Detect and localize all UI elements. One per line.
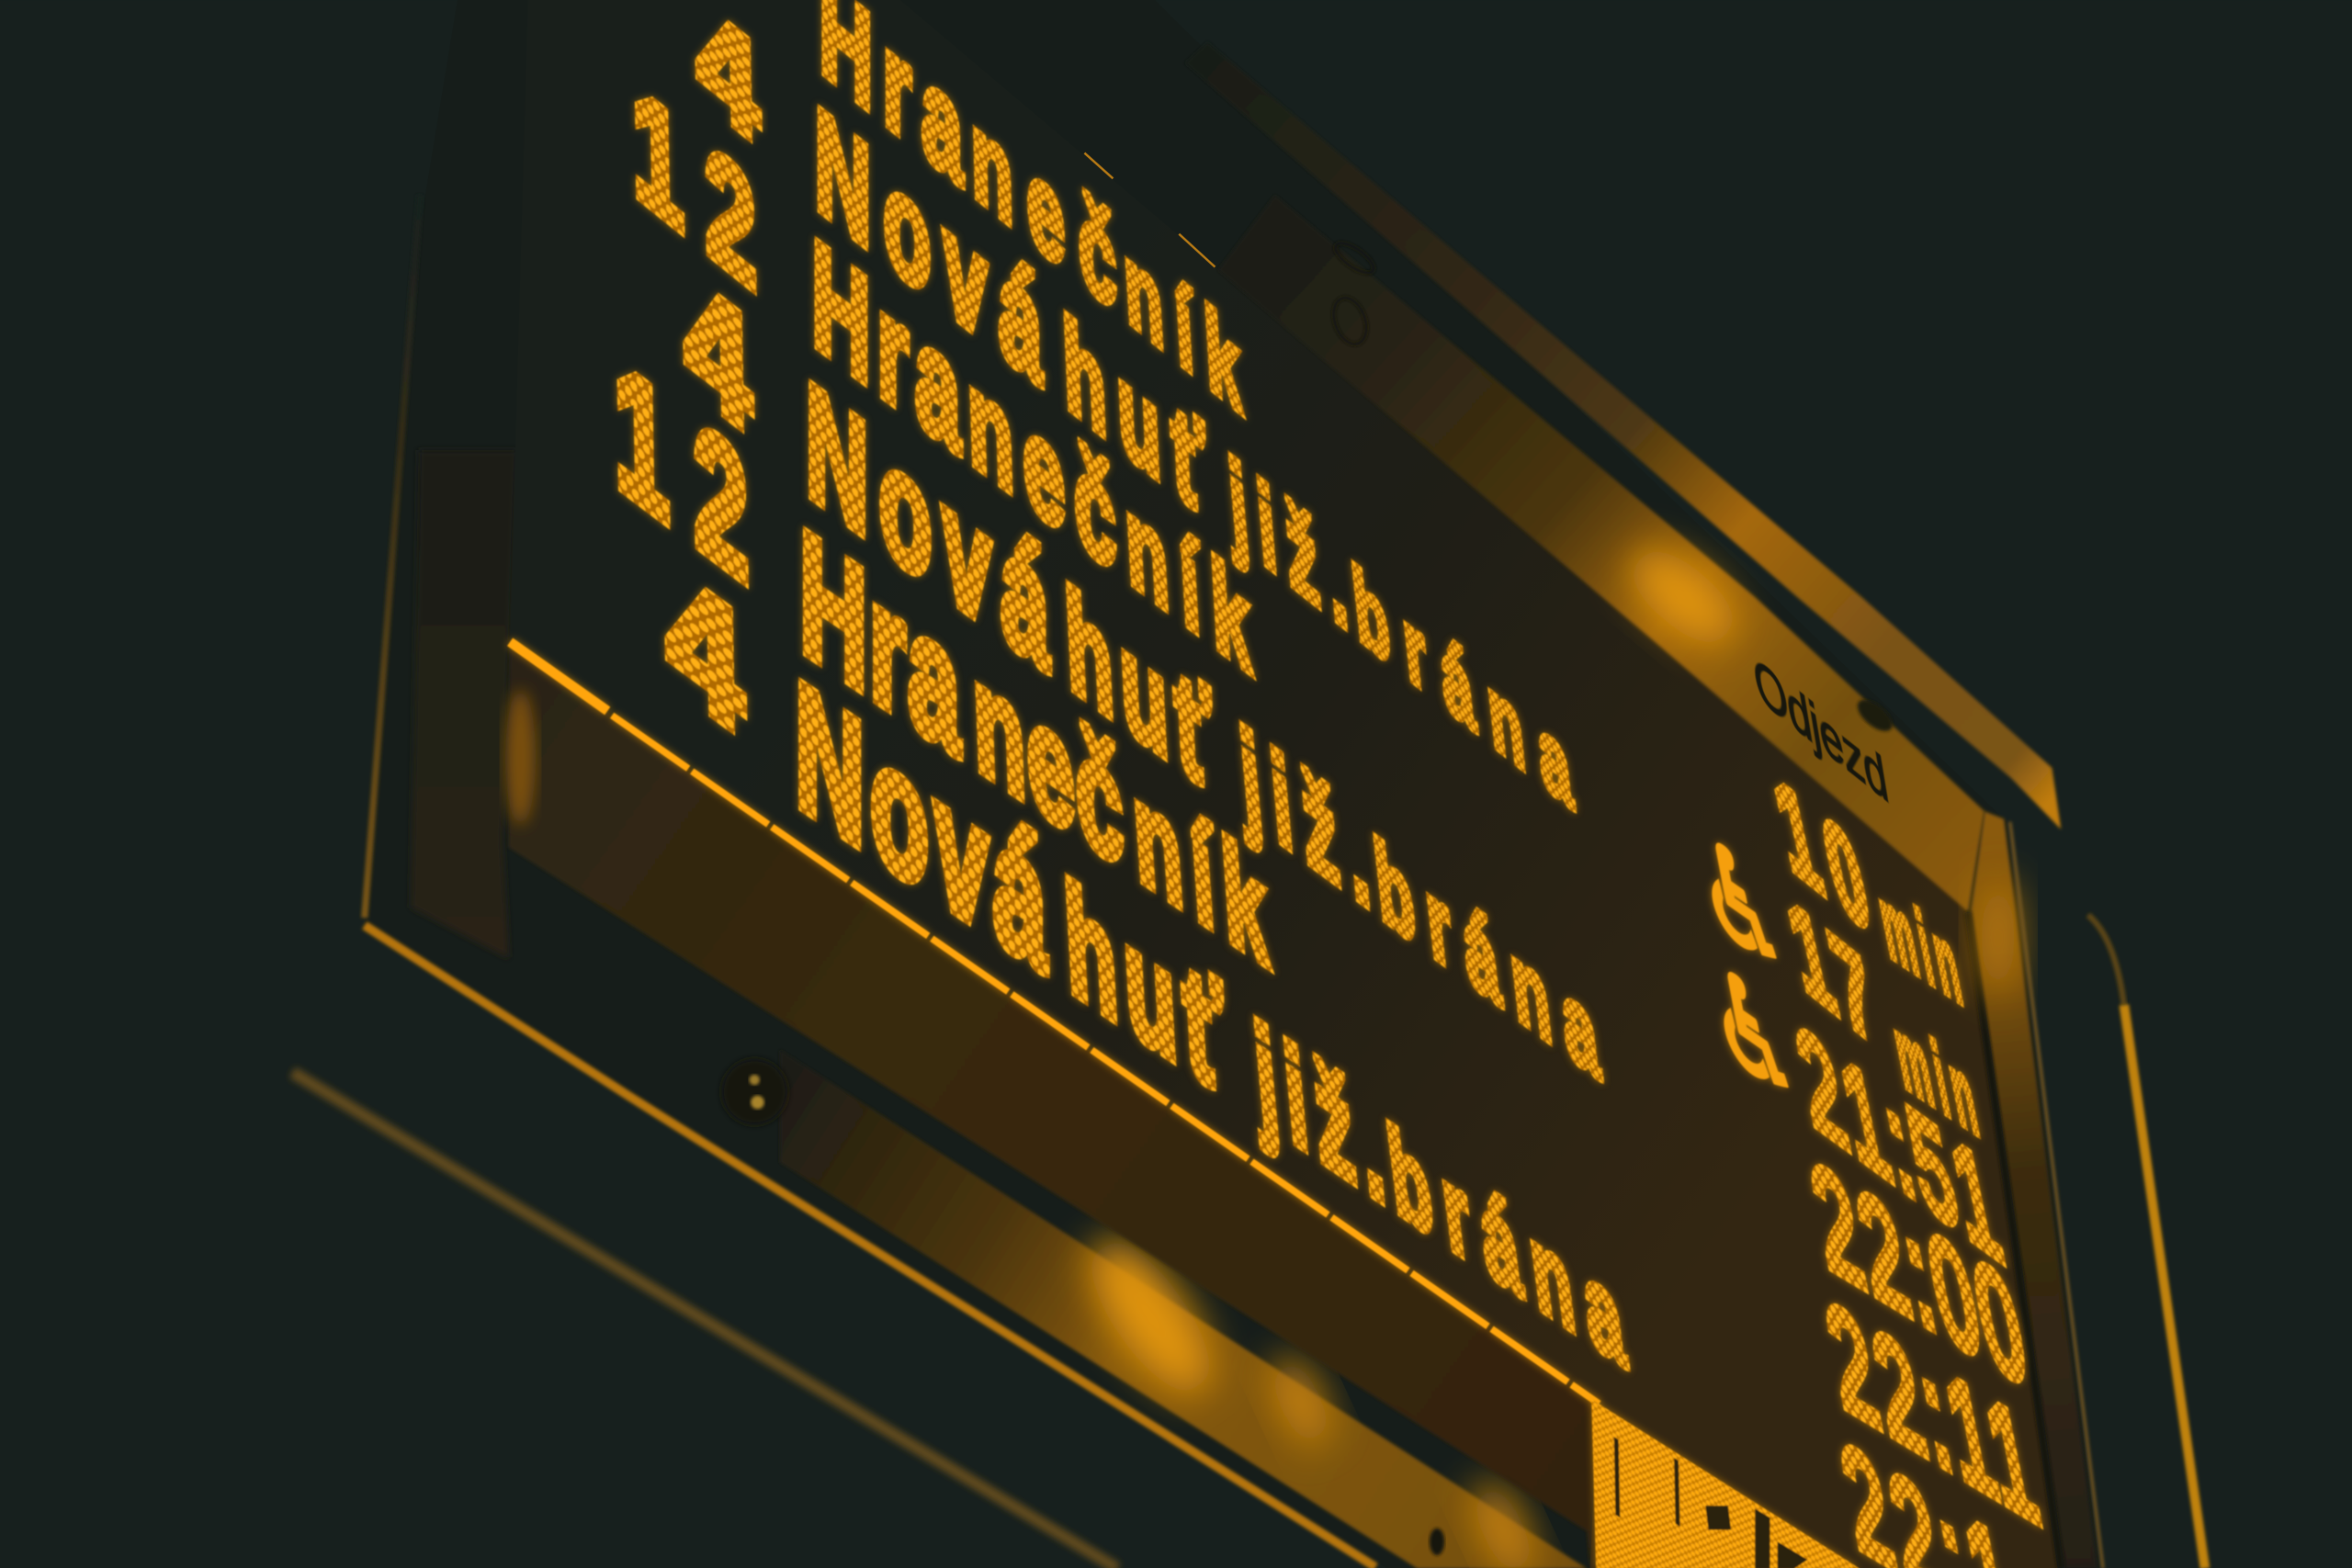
LED destinations row 2: Nová huť již.brána: Nová bbox=[815, 74, 1043, 418]
mounting marks bbox=[1328, 238, 1378, 349]
band glare bbox=[1615, 534, 1750, 660]
icon: wheelchair symbols: ♿ bbox=[1701, 929, 1807, 1139]
lower metal band bbox=[780, 1050, 1587, 1568]
LED line numbers: 12 bbox=[630, 51, 758, 327]
metal band above display bbox=[1218, 195, 1984, 912]
LED departure times: min bbox=[1884, 990, 1986, 1159]
LED destinations row 2: Nová huť již.brána: huť bbox=[1059, 288, 1209, 547]
LED departure times: 22:00 bbox=[1800, 1128, 2038, 1418]
LED destinations row 6: Nová huť již.brána bbox=[795, 640, 1632, 1396]
small dark mark above caption bbox=[1852, 694, 1898, 737]
LED destinations row 2: Nová huť již.brána: již. bbox=[1222, 429, 1352, 657]
LED destinations row 1: Hranečník: neč bbox=[969, 80, 1118, 340]
LED destinations row 6: Nová huť již.brána: již. bbox=[1246, 988, 1391, 1236]
right band glare bbox=[1980, 877, 2016, 998]
LED line numbers: 12 bbox=[612, 321, 751, 624]
dark seam between face and right band bbox=[1968, 912, 2061, 1568]
strip left glow bbox=[505, 690, 536, 825]
LED departure times: min bbox=[1870, 860, 1970, 1028]
right curved edge top bbox=[2088, 915, 2124, 1005]
LED destinations row 5: Hranečník: ník bbox=[1127, 744, 1273, 999]
right curved edge bbox=[2124, 1005, 2205, 1568]
LED destinations row 6: Nová huť již.brána: huť bbox=[1060, 846, 1229, 1131]
LED destinations row 5: Hranečník: neč bbox=[969, 623, 1126, 902]
LED destinations row 5: Hranečník bbox=[799, 491, 1273, 999]
thin line beside right band bbox=[2010, 822, 2103, 1568]
LED destinations row 4: Nová huť již.brána bbox=[806, 345, 1605, 1105]
LED destinations row 6: Nová huť již.brána: Nová bbox=[795, 640, 1047, 1011]
LED destinations row 6: Nová huť již.brána: brána bbox=[1380, 1097, 1632, 1396]
LED destinations row 4: Nová huť již.brána: Nová bbox=[806, 345, 1050, 707]
left frame edge bbox=[365, 195, 420, 918]
icon: wheelchair symbols: ♿ bbox=[1689, 799, 1795, 1010]
LED destinations row 2: Nová huť již.brána: brána bbox=[1347, 542, 1577, 834]
LED banner bottom bbox=[1591, 1399, 1860, 1568]
LED departure times: 17 bbox=[1776, 868, 1889, 1079]
LED destinations row 5: Hranečník: Hra bbox=[799, 491, 961, 795]
LED line numbers: 4 bbox=[665, 525, 745, 774]
LED departure times: 21:51 bbox=[1785, 993, 2013, 1294]
LED destinations row 3: Hranečník: ník bbox=[1121, 463, 1255, 703]
LED line numbers: 4 bbox=[683, 235, 752, 471]
glare slivers at face top bbox=[1084, 153, 1215, 267]
right vertical band bbox=[1971, 811, 2097, 1568]
LED destinations row 3: Hranečník: Hra bbox=[811, 206, 962, 488]
LED destinations row 2: Nová huť již.brána bbox=[815, 74, 1577, 834]
screw right bbox=[1430, 1529, 1444, 1555]
LED destinations row 3: Hranečník bbox=[811, 206, 1255, 703]
LED departure times bbox=[1762, 744, 2050, 1568]
board outer frame bbox=[365, 0, 2100, 1568]
icon: wheelchair symbols bbox=[1689, 799, 1807, 1139]
LED destinations row 4: Nová huť již.brána: huť bbox=[1061, 555, 1217, 825]
LED destinations row 1: Hranečník: ník bbox=[1120, 212, 1245, 441]
brown strip under the display bbox=[508, 645, 1598, 1568]
LED departure times: 10 bbox=[1762, 744, 1882, 964]
left inner frame panel bbox=[411, 450, 517, 958]
display face bbox=[510, 0, 2058, 1568]
LED destinations row 4: Nová huť již.brána: brána bbox=[1368, 811, 1605, 1105]
LED departure times: 22:11 bbox=[1815, 1268, 2050, 1556]
LED destinations row 1: Hranečník bbox=[819, 0, 1245, 441]
top lip of housing bbox=[1185, 42, 2061, 829]
screw left bbox=[721, 1059, 787, 1125]
caption: Odjezd: Odjezd bbox=[1748, 642, 1893, 818]
LED line numbers bbox=[612, 0, 761, 774]
LED destinations row 4: Nová huť již.brána: již. bbox=[1233, 697, 1375, 938]
bottom frame edge highlight bbox=[365, 925, 1375, 1567]
LED destinations row 3: Hranečník: neč bbox=[965, 333, 1118, 603]
bright divider line bbox=[510, 642, 1599, 1404]
dim lower reflection line bbox=[292, 1072, 1117, 1568]
